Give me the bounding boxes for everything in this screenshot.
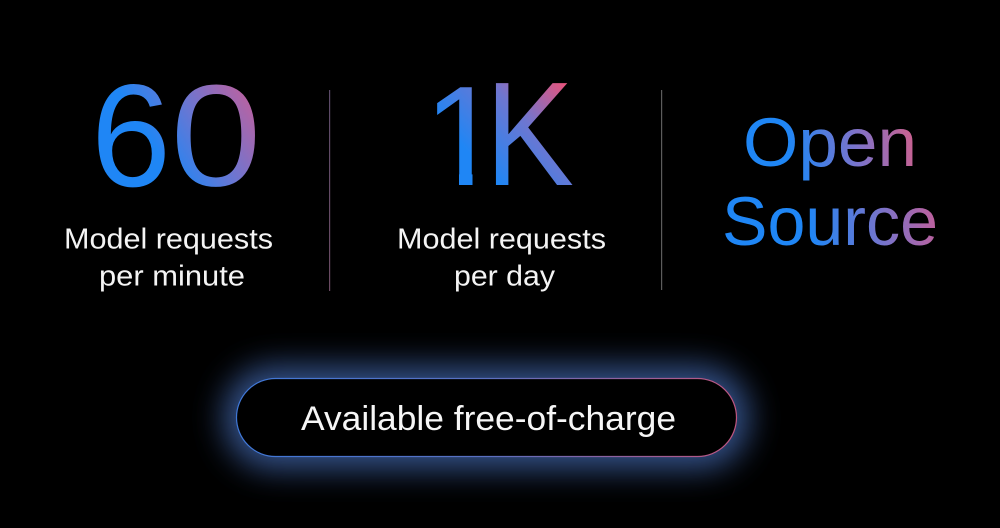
label: model requests per minute: Model requests xyxy=(64,224,273,256)
stat: 1K: K xyxy=(485,52,574,217)
label: model requests per day xyxy=(397,224,606,292)
heading: Open: Open xyxy=(743,104,917,181)
button pill xyxy=(236,378,736,456)
callout: available free-of-charge button xyxy=(224,366,749,469)
panel: 60 requests per minute xyxy=(64,54,273,292)
stat: 1K: 1 xyxy=(424,57,502,216)
panel: open source xyxy=(722,104,938,260)
label: model requests per minute: per minute xyxy=(99,260,245,292)
label: model requests per day: Model requests xyxy=(397,224,606,256)
heading: Source: Source xyxy=(722,183,938,260)
label: model requests per day: per day xyxy=(454,260,556,292)
button glow xyxy=(224,366,749,469)
stat: 60 xyxy=(91,54,262,217)
stat: 60: 0 xyxy=(170,54,262,217)
stat: 1K xyxy=(437,83,572,185)
label: model requests per minute xyxy=(64,224,273,292)
panel: 1K requests per day xyxy=(400,83,605,292)
stat: 60: 6 xyxy=(91,54,171,217)
button text: Available free-of-charge xyxy=(301,400,676,438)
